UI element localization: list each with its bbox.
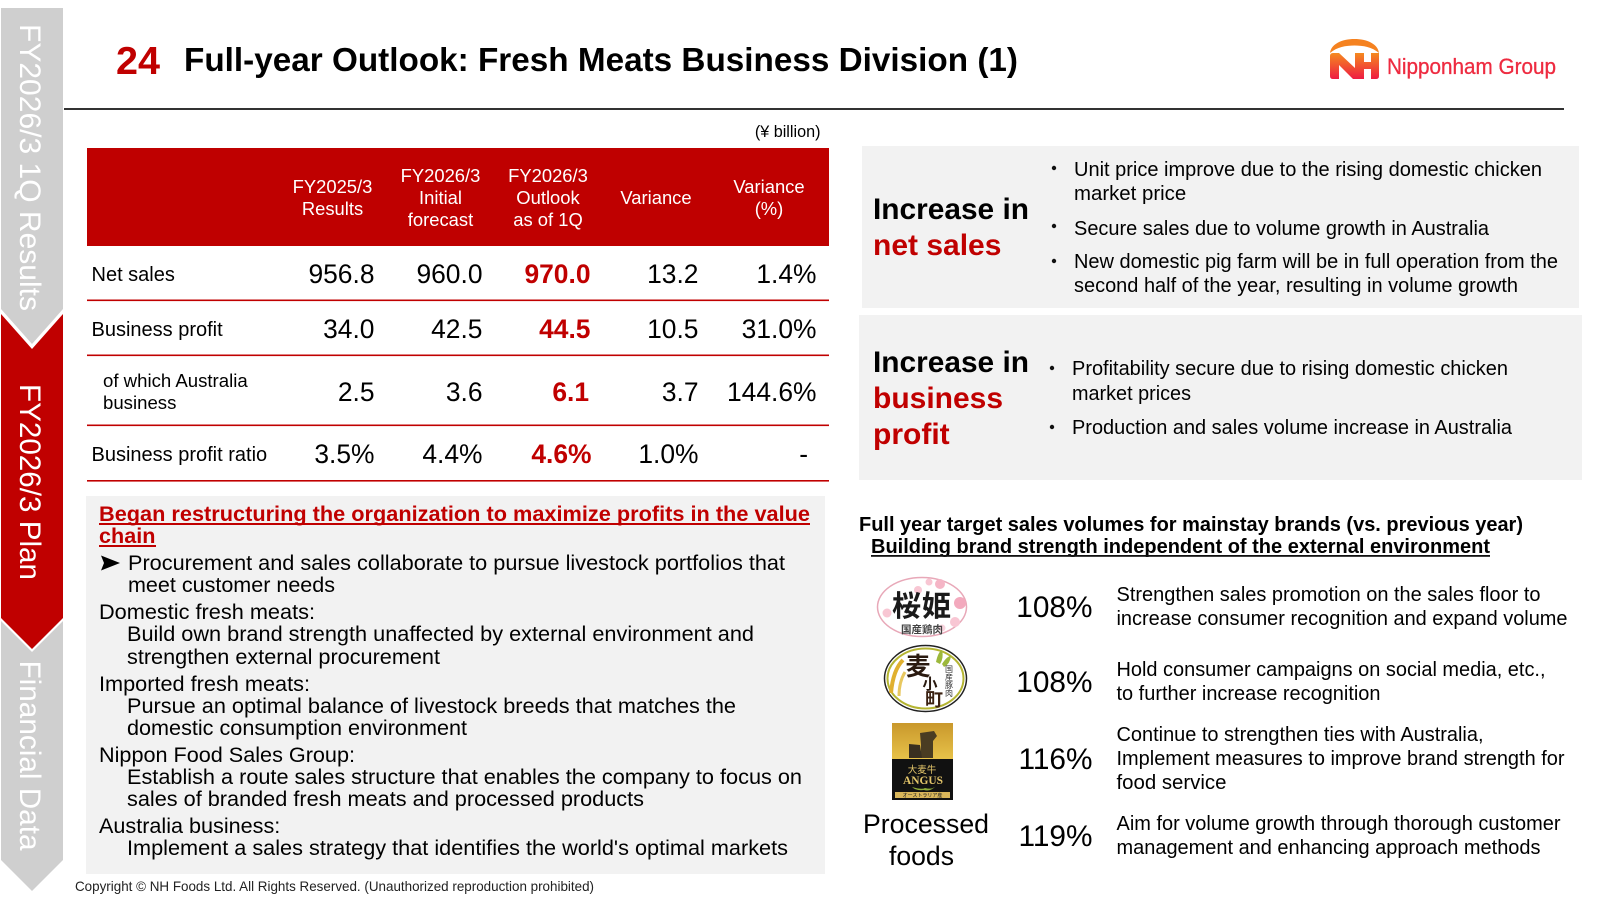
icon: Mugikomachi brand logo: 肉 [945,688,953,698]
row: of which Australia business: business [103,392,176,413]
row: of which Australia business: 6.1 [552,377,589,407]
row: business profit: Business profit [92,319,223,341]
text: procurement: Procurement and sales collaborate to pursue livestock portfolios that [128,550,785,575]
bullet list: Production and sales volume increase in Australia [1072,417,1513,439]
panel heading: profit [873,418,950,451]
row: net sales: 1.4% [756,259,816,289]
bullet list [1050,358,1513,439]
heading text: Full-year Outlook: Fresh Meats Business Division (1) [184,42,1018,79]
page number: 24 [116,40,160,83]
description: Aim for volume growth through thorough customer [1116,813,1561,835]
description [1116,813,1561,859]
text: imported fresh meats [99,671,736,740]
table header: Outlook [516,187,580,208]
table header: (%) [755,198,783,219]
row: of which Australia business: 3.7 [662,377,698,407]
text: imported fresh meats: domestic consumption environment [127,715,467,740]
row: net sales: 970.0 [524,259,590,289]
text: imported fresh meats: Imported fresh meats: [99,671,310,696]
panel: restructuring [86,496,825,874]
text: Nippon Food Sales Group: Nippon Food Sales Group: [99,742,355,767]
text: Nippon Food Sales Group [99,742,802,811]
text: domestic fresh meats: Build own brand strength unaffected by external environment and [127,621,754,646]
description [1116,659,1546,705]
bullet list: Unit price improve due to the rising domestic chicken [1074,159,1542,181]
icon: Angus brand logo [892,723,953,800]
copyright: Copyright © NH Foods Ltd. All Rights Reserved. (Unauthorized reproduction prohibited) [75,878,594,894]
row: net sales: 960.0 [416,259,482,289]
description: management and enhancing approach methods [1116,837,1540,859]
bullet list: second half of the year, resulting in volume growth [1074,275,1518,297]
icon: Angus brand logo: オーストラリア産 [903,792,942,799]
panel heading: Began restructuring the organization to maximize profits in the value [99,501,810,526]
brand label: foods [889,841,954,871]
panel: increase in net sales [862,146,1579,308]
description: Implement measures to improve brand strength for [1116,748,1565,770]
row: business profit ratio: 4.6% [531,439,592,469]
section heading: target sales volumes: Building brand strength independent of the external environment [871,536,1490,558]
tab: FY2026/3 Financial Data [1,621,63,891]
table header: FY2026/3 [508,165,588,186]
icon: Mugikomachi brand logo: 小 [922,676,938,693]
description: Hold consumer campaigns on social media, etc., [1116,659,1546,681]
text: domestic fresh meats: strengthen external procurement [127,644,440,669]
row: Oomugi-gyu Angus [892,723,1565,800]
logo: Nipponham Group: Nipponham Group [1387,54,1556,79]
percentage: 108% [1016,591,1092,624]
description: increase consumer recognition and expand volume [1116,608,1568,630]
row: of which Australia business: of which Australia [103,370,248,391]
tab: FY2026/3 1Q Results: FY2026/3 1Q Results [13,24,46,311]
row: business profit ratio: 1.0% [638,439,698,469]
panel heading: Increase in [873,346,1029,379]
row: business profit ratio: 3.5% [314,439,374,469]
row: Mugikomachi [884,646,1546,712]
description: Strengthen sales promotion on the sales floor to [1116,584,1540,606]
table header: Results [302,198,363,219]
bullet list: Profitability secure due to rising domestic chicken [1072,358,1508,380]
row: of which Australia business: 3.6 [446,377,482,407]
unit note: (¥ billion) [755,123,820,141]
row: of which Australia business: 2.5 [338,377,374,407]
brand label [863,809,989,871]
row: business profit [92,314,816,344]
row: business profit ratio: - [799,439,808,469]
text: Nippon Food Sales Group: sales of branded fresh meats and processed products [127,786,644,811]
text: procurement [128,550,785,597]
table header: FY2025/3 [293,176,372,197]
row: Sakurahime [878,578,1568,636]
icon: arrow bullet [101,556,120,570]
bullet list: Secure sales due to volume growth in Australia [1074,218,1490,240]
row: of which Australia business [103,370,816,413]
tab: FY2026/3 1Q Results [1,8,63,344]
table header [87,148,829,246]
panel heading [99,501,810,548]
icon: Mugikomachi brand logo: 国 [945,665,953,674]
text: imported fresh meats: Pursue an optimal balance of livestock breeds that matches the [127,693,736,718]
tab: FY2026/3 Financial Data: Financial Data [13,660,46,851]
icon: Mugikomachi brand logo [884,646,966,712]
text: Nippon Food Sales Group: Establish a route sales structure that enables the company to focus on [127,764,802,789]
table: financial outlook [87,148,829,482]
icon: Sakurahime brand logo: 国産鶏肉 [901,623,943,636]
panel heading: net sales [873,229,1001,262]
table header: Variance [620,187,692,208]
tab: FY2026/3 Plan (active) [1,314,63,649]
logo: Nipponham Group [1330,39,1556,79]
text: Australia business: Australia business: [99,813,280,838]
row: business profit ratio: 4.4% [422,439,482,469]
panel heading: business [873,382,1003,415]
table header: Variance [733,176,805,197]
panel: increase in business profit [859,315,1582,480]
row: net sales [92,259,816,289]
percentage: 119% [1018,820,1092,853]
icon: Mugikomachi brand logo: 産 [945,672,953,682]
text: domestic fresh meats [99,599,754,669]
text: Australia business: Implement a sales strategy that identifies the world's optimal markets [127,835,788,860]
icon: Sakurahime brand logo [878,578,966,636]
row: business profit: 44.5 [539,314,590,344]
section heading: target sales volumes [859,514,1523,558]
table header: Initial [419,187,462,208]
row: net sales: Net sales [92,264,175,286]
percentage: 116% [1018,743,1092,776]
row: net sales: 956.8 [308,259,374,289]
row: Processed foods [863,809,1561,871]
bullet list [1052,159,1558,297]
icon: Angus brand logo: 大麦牛 [908,764,937,776]
panel heading: chain [99,523,155,548]
percentage: 108% [1016,666,1092,699]
text: procurement: meet customer needs [128,572,335,597]
brand label: Processed [863,809,989,839]
row: of which Australia business: 144.6% [727,377,816,407]
text: domestic fresh meats: Domestic fresh meats: [99,599,315,624]
panel heading [873,346,1029,451]
table header: as of 1Q [513,209,583,230]
panel heading: Increase in [873,193,1029,226]
icon: Sakurahime brand logo: 桜姫 [892,590,952,623]
sidebar navigation [1,8,63,891]
row: business profit ratio: Business profit ratio [92,444,267,466]
bullet list: market price [1074,183,1186,205]
description [1116,724,1565,794]
tab: FY2026/3 Plan (active): FY2026/3 Plan [13,384,46,580]
text: Australia business [99,813,788,860]
panel heading [873,193,1029,262]
row: business profit: 10.5 [647,314,698,344]
description: to further increase recognition [1116,683,1380,705]
row: business profit: 42.5 [431,314,482,344]
row: business profit: 31.0% [742,314,816,344]
table header: FY2026/3 [401,165,480,186]
icon: Mugikomachi brand logo: 麦 [905,653,931,681]
table header: forecast [408,209,473,230]
bullet list: New domestic pig farm will be in full operation from the [1074,251,1558,273]
row: net sales: 13.2 [647,259,698,289]
row: business profit ratio [92,439,808,469]
description: food service [1116,772,1226,794]
row: business profit: 34.0 [323,314,374,344]
bullet list: market prices [1072,383,1191,405]
section heading: target sales volumes: Full year target sales volumes for mainstay brands (vs. previous year) [859,514,1523,536]
icon: Mugikomachi brand logo: 町 [925,690,943,710]
description [1116,584,1568,630]
title [116,40,1018,83]
description: Continue to strengthen ties with Australia, [1116,724,1484,746]
icon: Angus brand logo: ANGUS [903,773,943,787]
icon: Mugikomachi brand logo: 豚 [945,681,953,690]
